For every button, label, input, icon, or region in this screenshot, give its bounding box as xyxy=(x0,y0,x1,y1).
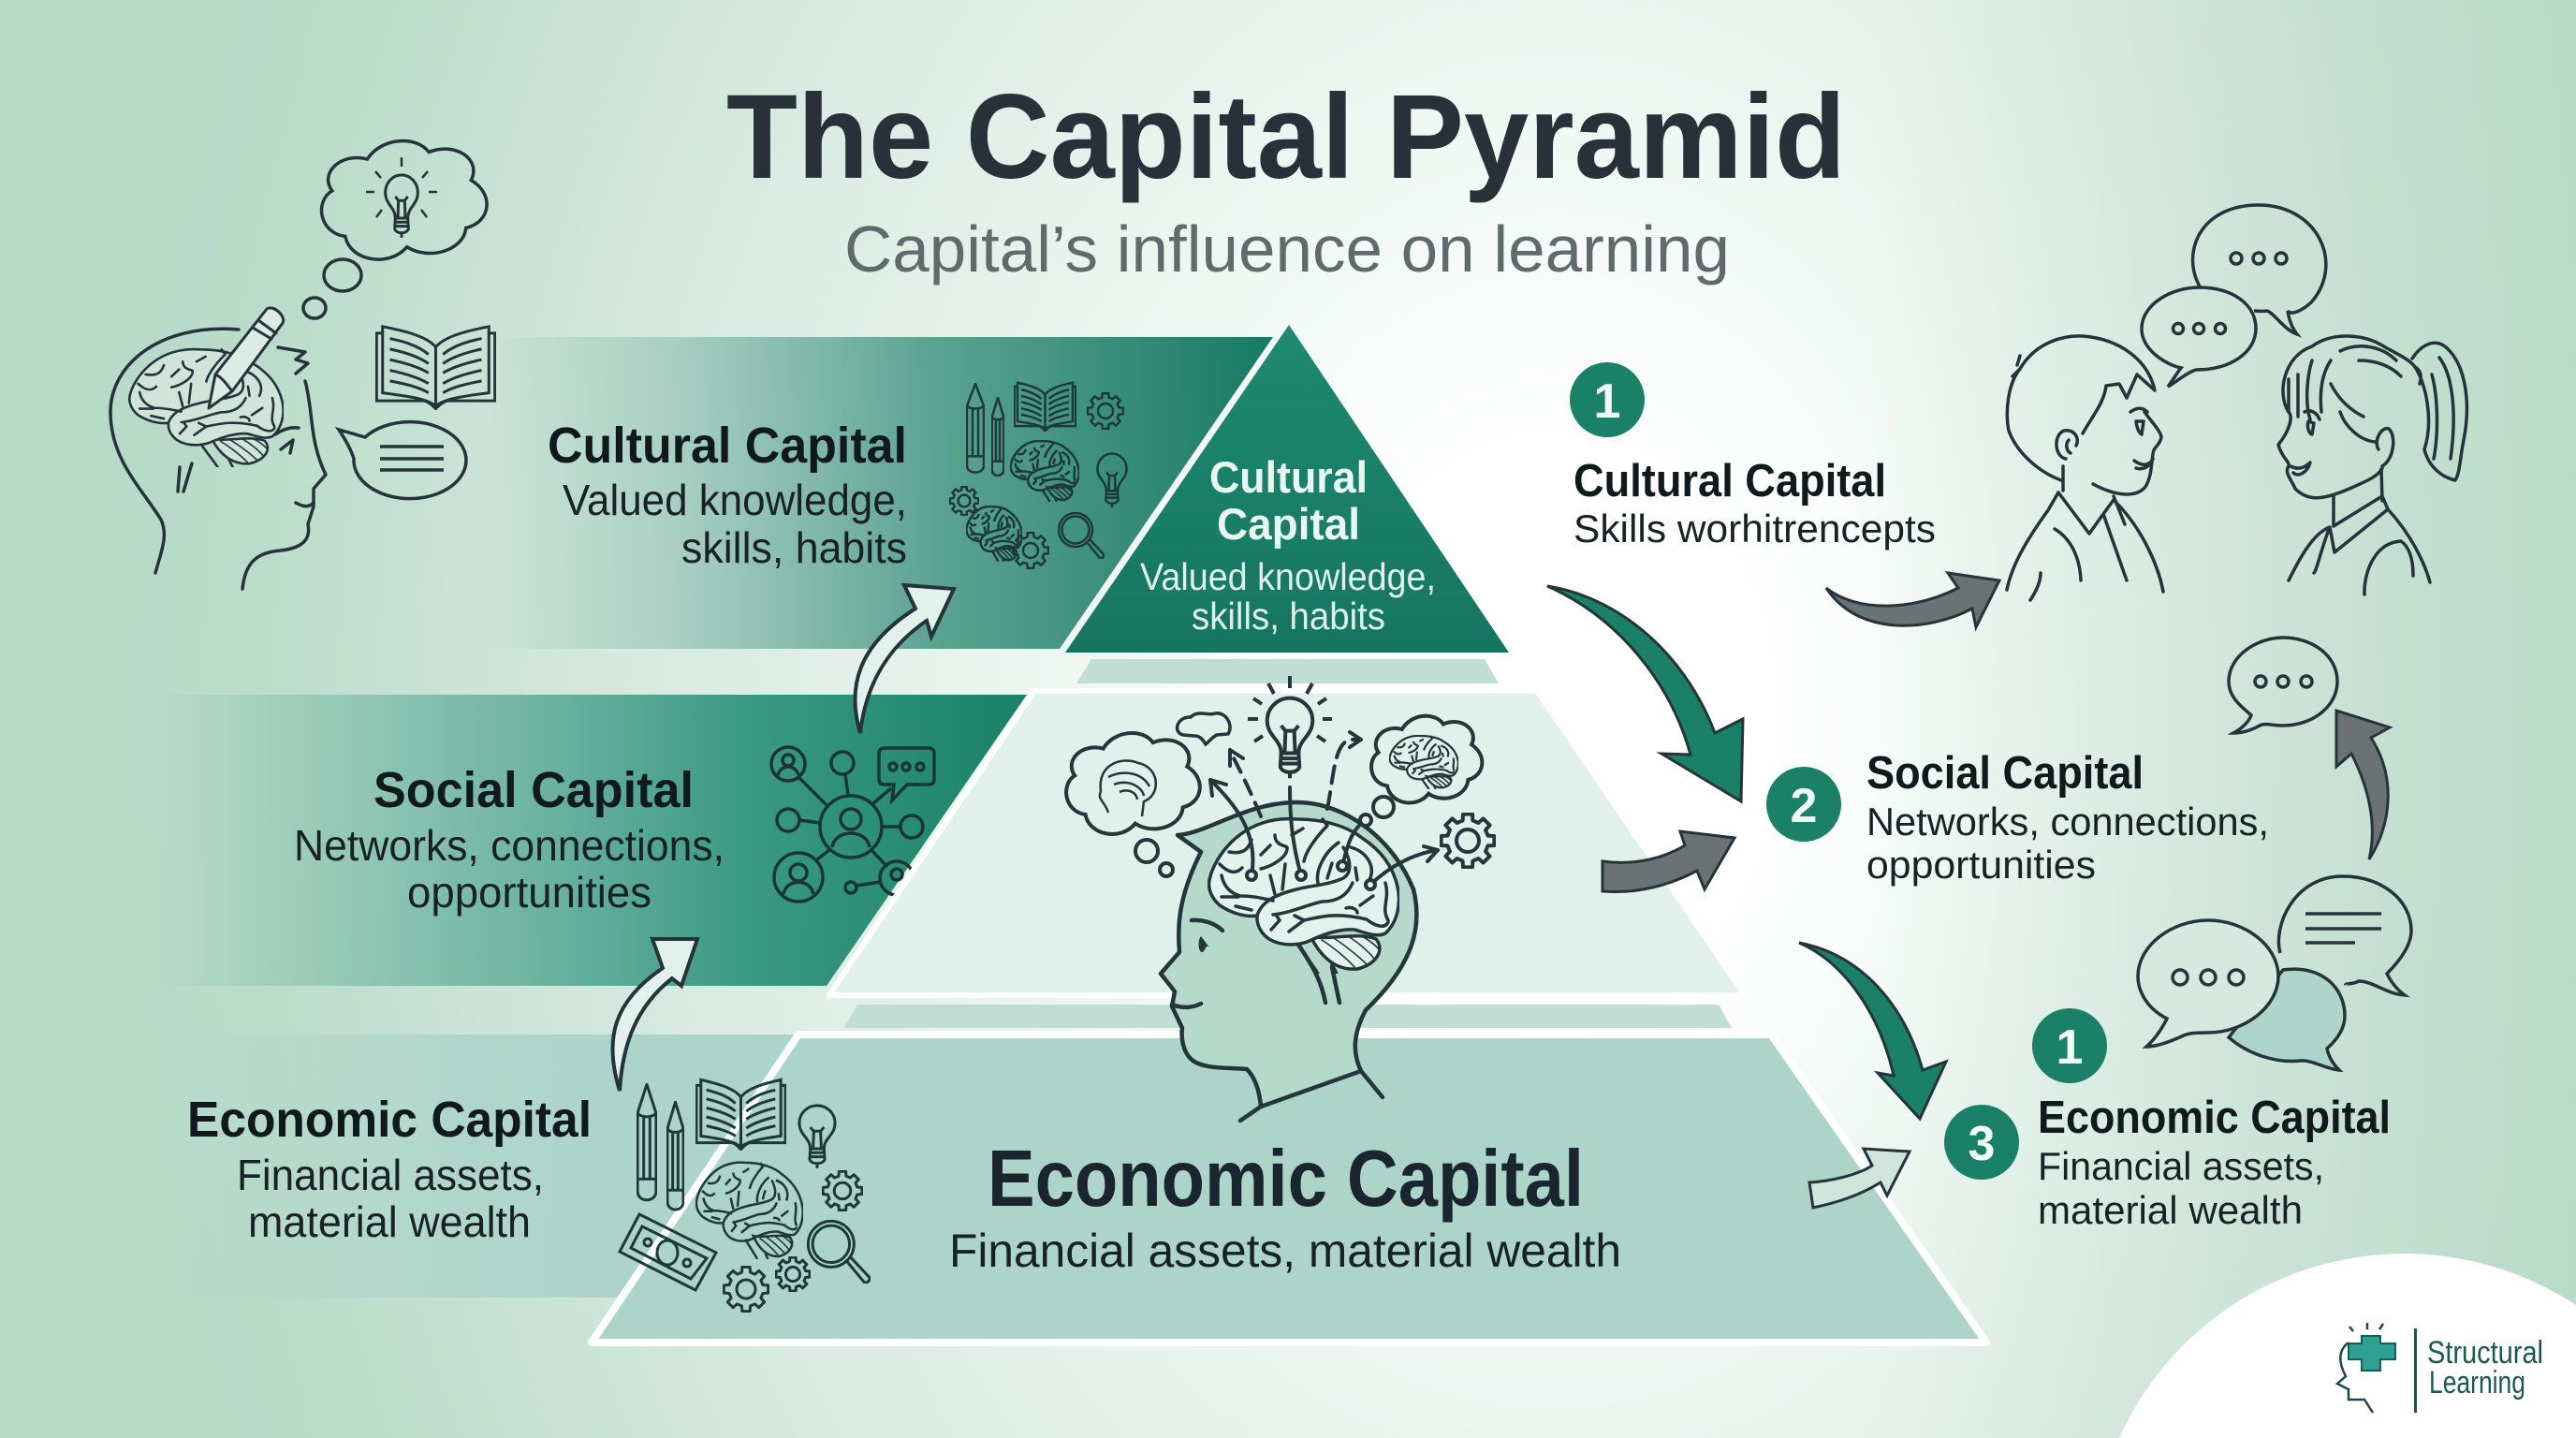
band text: cultural capital: Valued knowledge, xyxy=(563,476,907,524)
icon: banknote xyxy=(620,1214,716,1290)
callout: 2 social capital xyxy=(1766,748,2269,887)
lines bubble xyxy=(2278,876,2411,995)
arrow: grey to social xyxy=(1603,831,1734,892)
icon: upper right speech bubble xyxy=(2229,638,2337,733)
white corner badge xyxy=(2119,1254,2576,1438)
tier description: Financial assets, material wealth xyxy=(949,1225,1621,1277)
arrow: social to cultural xyxy=(855,585,954,733)
top tier description: Valued knowledge, xyxy=(1140,555,1436,598)
callout: 2 social capital: Networks, connections, xyxy=(1866,800,2269,844)
callout: 1 cultural capital: Skills worhitrencepts xyxy=(1573,506,1936,550)
pyramid: middle tier social capital xyxy=(829,691,1745,995)
callout: 3 economic capital: 3 xyxy=(1969,1117,1995,1171)
band text: social capital xyxy=(294,762,724,917)
panel: cultural capital band xyxy=(487,337,1273,649)
icon: left head with pencil and brain xyxy=(110,308,326,589)
callout: 1 cultural capital: Cultural Capital xyxy=(1573,456,1886,506)
mint bubble xyxy=(2229,969,2345,1070)
panel: economic capital band xyxy=(159,1034,833,1298)
icon: small speech bubble with dots xyxy=(2142,287,2256,387)
icon: social network xyxy=(771,747,934,902)
pyramid: upper thin strip xyxy=(1076,659,1499,683)
arrow: green down to social xyxy=(1547,586,1743,801)
logo divider xyxy=(2414,1328,2417,1413)
icon: girl xyxy=(2278,336,2466,594)
callout: 1 badge above economic capital: 1 xyxy=(2056,1020,2083,1075)
tier heading: Economic Capital xyxy=(988,1135,1584,1224)
band text: economic capital xyxy=(187,1092,592,1246)
callout: 3 economic capital: material wealth xyxy=(2038,1188,2303,1232)
arrow: green down to economic xyxy=(1799,943,1946,1119)
icon: pencil in head xyxy=(209,308,284,408)
top tier description xyxy=(1140,555,1436,638)
arrow: grey toward children xyxy=(1826,573,1999,627)
icon: small cloud xyxy=(1178,713,1230,744)
logo wordmark xyxy=(2427,1335,2543,1401)
pyramid: bottom tier economic capital xyxy=(592,1034,1986,1343)
arrow: mint to economic xyxy=(1809,1149,1910,1208)
icon: speech bubble trio xyxy=(2138,876,2411,1070)
callout: 1 cultural capital xyxy=(1570,362,1936,550)
callout: 2 social capital: 2 xyxy=(1791,779,1817,833)
icon: thought cloud with head xyxy=(1066,733,1200,876)
logo: structural learning xyxy=(2337,1323,2543,1413)
logo mark xyxy=(2337,1323,2395,1413)
pyramid: lower thin strip xyxy=(844,1005,1732,1028)
arrow: economic to social xyxy=(612,939,697,1091)
band text: economic capital: Economic Capital xyxy=(187,1092,592,1148)
pyramid: top tier cultural capital xyxy=(1065,325,1509,653)
icons: economic learning cluster xyxy=(620,1079,870,1312)
top tier description: skills, habits xyxy=(1192,594,1385,638)
band text: cultural capital: skills, habits xyxy=(681,523,907,572)
icon: large lightbulb xyxy=(1248,676,1332,778)
dots bubble xyxy=(2138,920,2278,1047)
thought flow arrows xyxy=(1210,732,1438,889)
callout: 3 economic capital: Financial assets, xyxy=(2038,1144,2324,1188)
icon: thought cloud with bulb xyxy=(303,140,487,318)
icon: speech bubble with lines xyxy=(339,422,466,499)
icon: thought cloud with brain xyxy=(1371,716,1482,817)
logo wordmark: Structural xyxy=(2427,1335,2543,1371)
callout: 3 economic capital xyxy=(1944,1093,2391,1232)
subtitle: Capital’s influence on learning xyxy=(844,213,1730,286)
arrow: grey up to speech bubble xyxy=(2336,711,2390,859)
top tier heading: Capital xyxy=(1217,499,1360,549)
top tier heading xyxy=(1209,452,1368,549)
band text: economic capital: material wealth xyxy=(248,1197,531,1246)
icon: open book xyxy=(376,327,495,409)
callout: 2 social capital: Social Capital xyxy=(1866,748,2144,799)
icon: big speech bubble with dots xyxy=(2193,205,2326,334)
panel: social capital band xyxy=(159,695,1027,986)
band text: social capital: Social Capital xyxy=(373,762,694,818)
top tier heading: Cultural xyxy=(1209,452,1368,502)
icon: central head with brain xyxy=(1161,732,1438,1121)
callout: 3 economic capital: Economic Capital xyxy=(2038,1093,2391,1143)
callout: 1 cultural capital: 1 xyxy=(1594,374,1620,429)
band text: cultural capital xyxy=(548,418,907,572)
band text: economic capital: Financial assets, xyxy=(237,1151,544,1199)
icon: gear xyxy=(1442,814,1494,867)
band text: social capital: Networks, connections, xyxy=(294,821,724,870)
title: The Capital Pyramid xyxy=(726,70,1846,204)
band text: social capital: opportunities xyxy=(407,868,651,917)
logo wordmark: Learning xyxy=(2429,1365,2525,1401)
icon: boy xyxy=(2007,336,2163,600)
band text: cultural capital: Cultural Capital xyxy=(548,418,907,474)
callout: 2 social capital: opportunities xyxy=(1866,843,2096,887)
callout: 1 badge above economic capital xyxy=(2032,1008,2107,1083)
brain xyxy=(1209,819,1398,974)
icons: cultural learning cluster xyxy=(950,383,1127,568)
